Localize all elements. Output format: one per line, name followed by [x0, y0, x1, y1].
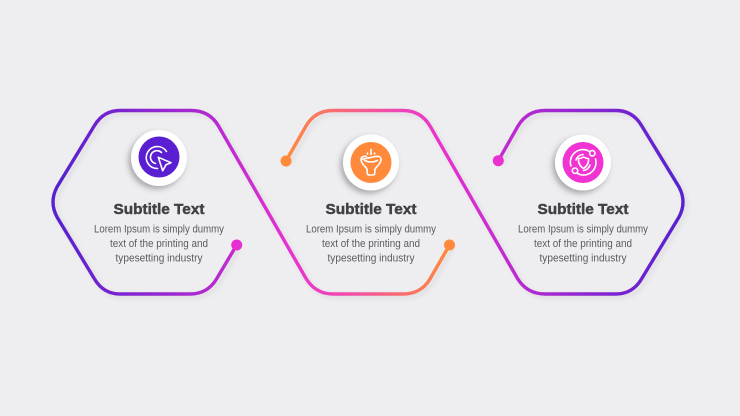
- icon: shield orbit: [555, 134, 611, 190]
- connector line: left hexagon flowing into middle hexagon bottom: [53, 110, 450, 294]
- heading: Subtitle Text: [326, 202, 417, 218]
- body text: typesetting industry: [328, 253, 415, 265]
- body text: [306, 224, 437, 265]
- body text: typesetting industry: [540, 253, 627, 265]
- body text: text of the printing and: [110, 238, 208, 250]
- body text: Lorem Ipsum is simply dummy: [94, 224, 225, 236]
- icon: cursor target: [131, 130, 187, 186]
- end dot: middle hexagon bottom: [444, 240, 455, 250]
- icon: funnel: [343, 134, 399, 190]
- connector line: middle hexagon top flowing into right hexagon: [286, 110, 683, 294]
- body text: [94, 224, 225, 265]
- body text: text of the printing and: [322, 238, 420, 250]
- panel: step 2: [306, 134, 437, 265]
- body text: Lorem Ipsum is simply dummy: [518, 224, 649, 236]
- heading: Subtitle Text: [114, 202, 205, 218]
- end dot: right hexagon: [493, 155, 504, 166]
- end dot: middle hexagon top: [280, 156, 292, 166]
- end dot: left hexagon: [231, 240, 242, 250]
- panel: step 3: [518, 134, 649, 265]
- body text: [518, 224, 649, 265]
- body text: text of the printing and: [534, 238, 632, 250]
- body text: Lorem Ipsum is simply dummy: [306, 224, 437, 236]
- panel: step 1: [94, 130, 225, 265]
- heading: Subtitle Text: [538, 202, 629, 218]
- body text: typesetting industry: [116, 253, 203, 265]
